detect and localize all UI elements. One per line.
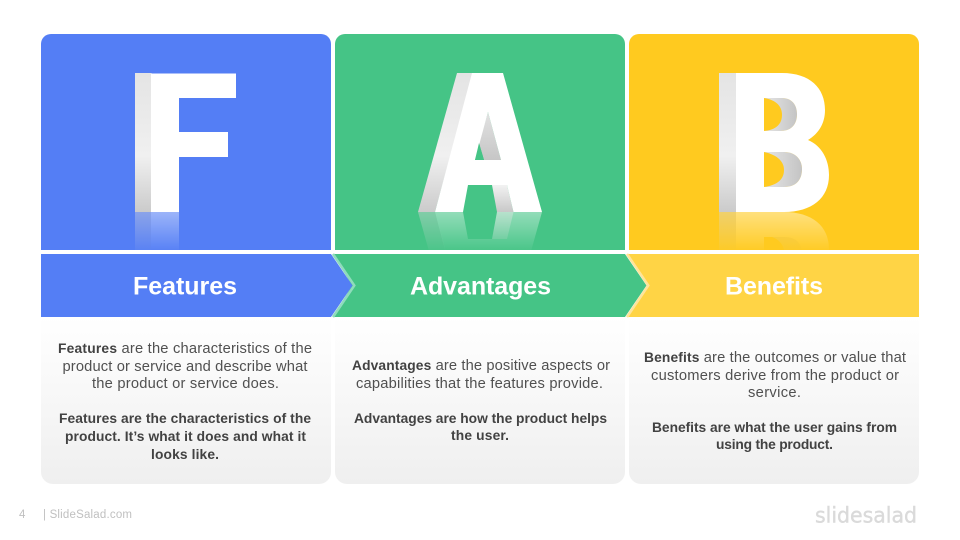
description: Features <box>58 341 312 392</box>
summary: Features: Features are the characteristics of the <box>59 411 311 426</box>
description: Benefits: Benefits are the outcomes or value that <box>644 350 906 366</box>
logo: slidesalad: slidesalad <box>815 504 917 528</box>
description: Benefits: service. <box>748 385 801 401</box>
description: Benefits <box>644 350 906 401</box>
page number: 4 <box>19 509 26 521</box>
label: Advantages: Advantages <box>410 272 551 300</box>
summary: Advantages <box>354 411 607 443</box>
description: Benefits: customers derive from the product or <box>651 368 899 384</box>
text panel: Benefits <box>629 317 919 484</box>
arrow: Benefits <box>627 254 919 317</box>
label: Benefits: Benefits <box>725 272 823 300</box>
colour block: Benefits <box>629 34 919 250</box>
panel: Advantages <box>335 34 625 250</box>
summary: Features: looks like. <box>151 447 219 462</box>
arrow: Advantages <box>333 254 648 317</box>
text panel: Advantages <box>335 317 625 484</box>
text panel: Features <box>41 317 331 484</box>
summary: Features: product. It’s what it does and what it <box>65 429 306 444</box>
description: Advantages: capabilities that the features provide. <box>356 376 603 392</box>
description: Features: product or service and describe what <box>62 359 308 375</box>
icon: letter B <box>719 73 829 250</box>
colour block: Advantages <box>335 34 625 250</box>
icon: letter A <box>418 73 542 250</box>
summary: Benefits: Benefits are what the user gains from <box>652 420 897 435</box>
summary: Benefits: using the product. <box>716 437 833 452</box>
colour block: Features <box>41 34 331 250</box>
arrow: Features <box>41 254 354 317</box>
summary: Advantages: Advantages are how the product helps <box>354 411 607 426</box>
label: Features: Features <box>133 272 237 300</box>
icon: letter F <box>135 73 236 250</box>
summary: Features <box>59 411 311 462</box>
description: Advantages: Advantages are the positive aspects or <box>352 358 610 374</box>
description: Advantages <box>352 358 610 392</box>
description: Features: the product or service does. <box>92 376 279 392</box>
summary: Advantages: the user. <box>451 428 509 443</box>
footer site name: | SlideSalad.com <box>43 509 132 521</box>
panel: Features <box>41 34 331 250</box>
summary: Benefits <box>652 420 897 452</box>
panel: Benefits <box>629 34 919 250</box>
description: Features: Features are the characteristics of the <box>58 341 312 357</box>
